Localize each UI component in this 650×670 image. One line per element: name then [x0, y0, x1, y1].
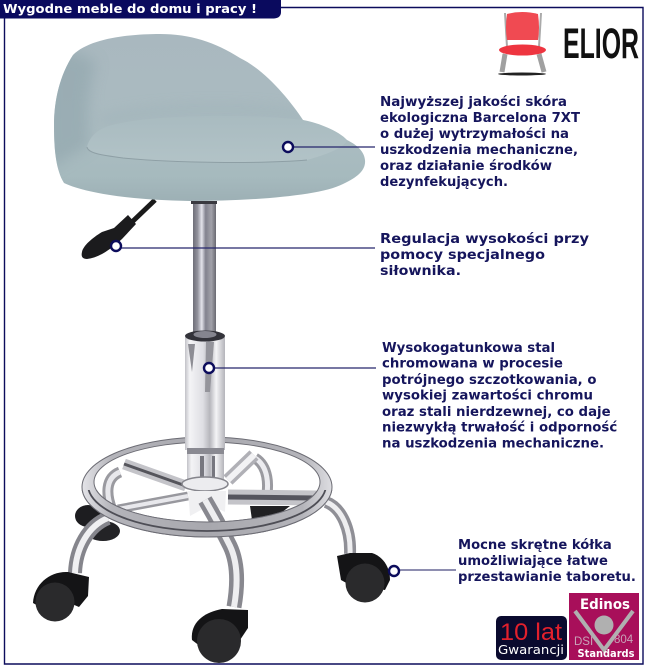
seat cushion [87, 116, 347, 163]
callout: chrome steel: wysokiej zawartości chromu [382, 388, 593, 404]
badge: Edinos standards: Standards [578, 648, 634, 660]
callout: seat material: oraz działanie środków [380, 159, 552, 174]
callout: seat material: uszkodzenia mechaniczne, [380, 143, 578, 158]
gas lever [82, 200, 155, 259]
callout: seat material: ekologiczna Barcelona 7XT [380, 111, 580, 126]
upper piston [193, 201, 216, 336]
badge: Edinos standards: DSI [574, 636, 593, 648]
badge: Edinos standards [569, 593, 639, 660]
spokes [118, 455, 316, 509]
back arches [108, 458, 268, 510]
front leg [205, 500, 237, 607]
badge: 10 year warranty: Gwarancji [498, 643, 564, 657]
brand logo: Elior [498, 12, 639, 76]
badge: 10 year warranty: 10 lat [500, 619, 562, 646]
callout: height adjustment: siłownika. [380, 264, 461, 279]
right leg [326, 502, 350, 554]
lower column [182, 330, 228, 491]
caster left [33, 572, 89, 622]
callout: casters: umożliwiające łatwe [458, 554, 608, 569]
back casters [75, 505, 290, 541]
callout: casters: przestawianie taboretu. [458, 570, 636, 585]
badge: 10 year warranty [496, 616, 567, 660]
callout: seat material: o dużej wytrzymałości na [380, 127, 569, 142]
callout: seat material [283, 95, 580, 190]
callout: chrome steel: niezwykłą trwałość i odporność [382, 420, 617, 436]
callout: chrome steel [204, 341, 617, 452]
callout: chrome steel: oraz stali nierdzewnej, co daje [382, 405, 611, 420]
foot ring front [82, 490, 332, 538]
header banner: Wygodne meble do domu i pracy ! [3, 1, 257, 16]
hub [188, 491, 226, 516]
callout: chrome steel: potrójnego szczotkowania, o [382, 372, 596, 388]
callout: chrome steel: na uszkodzenia mechaniczne. [382, 436, 604, 452]
callout: seat material: dezynfekujących. [380, 175, 508, 190]
seat shading [54, 52, 94, 166]
badge: Edinos standards: Edinos [580, 597, 630, 613]
callout: casters [389, 538, 636, 585]
callout: height adjustment: Regulacja wysokości przy [380, 232, 590, 247]
header banner [0, 0, 281, 18]
callout: casters: Mocne skrętne kółka [458, 538, 612, 553]
callout: seat material: Najwyższej jakości skóra [380, 95, 567, 110]
callout: chrome steel: Wysokogatunkowa stal [382, 341, 555, 356]
foot ring rear [82, 437, 332, 537]
badge: Edinos standards: 804 [614, 634, 634, 646]
caster right [337, 553, 390, 602]
callout: height adjustment: pomocy specjalnego [380, 248, 545, 263]
stool [33, 34, 390, 663]
callout: height adjustment [111, 232, 590, 279]
piston collar [191, 201, 217, 204]
callout: chrome steel: chromowana w procesie [382, 356, 563, 372]
left leg [75, 518, 108, 573]
icon: red chair [498, 12, 546, 76]
seat and backrest [46, 34, 365, 201]
caster front [192, 609, 248, 663]
